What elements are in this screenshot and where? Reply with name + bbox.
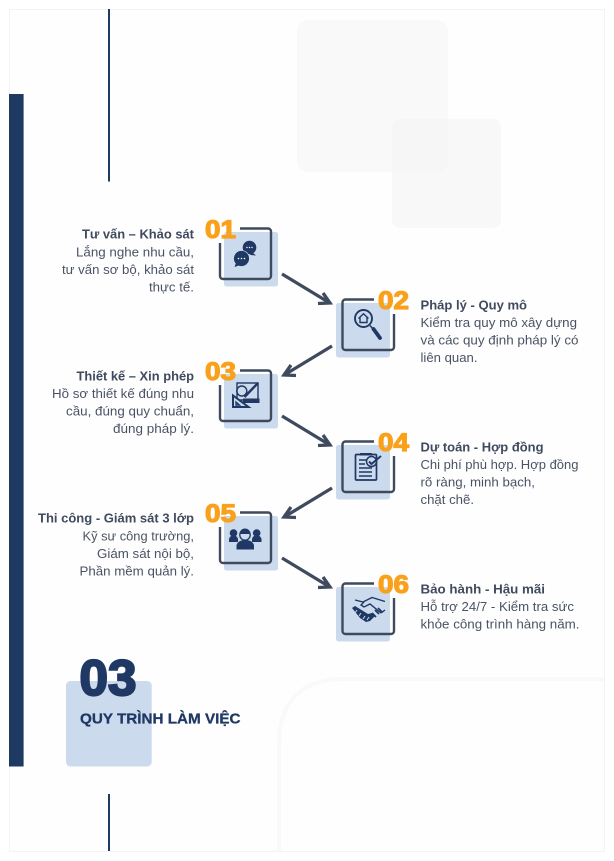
step 01 number: 01 (205, 216, 236, 244)
icon: three engineers (229, 528, 262, 550)
step 02 text: Pháp lý - Quy mô (420, 298, 527, 312)
step 01 (62, 216, 278, 294)
step 03 text: đúng pháp lý. (113, 421, 194, 436)
step 02 text: liên quan. (420, 350, 478, 365)
step 04 text: chặt chẽ. (420, 492, 474, 507)
section heading: QUY TRÌNH LÀM VIỆC (80, 710, 241, 728)
step 02 number: 02 (378, 287, 409, 315)
step 05 text (38, 510, 194, 578)
section number: 03 (80, 650, 136, 706)
step 03 frame (220, 370, 271, 421)
step 01 text: tư vấn sơ bộ, khảo sát (62, 262, 194, 277)
step 04 (336, 429, 578, 507)
step 01 text: thực tế. (149, 280, 194, 294)
step 06 frame (342, 584, 394, 634)
step 03 blue square (224, 374, 278, 428)
step 06 text: Hỗ trợ 24/7 - Kiểm tra sức (420, 599, 574, 614)
step 04 text: rõ ràng, minh bạch, (420, 474, 535, 490)
step 05 text: Giám sát nội bộ, (97, 546, 194, 561)
icon: clipboard with check (356, 453, 381, 480)
bottom vertical line (108, 794, 110, 851)
step 05 text: Kỹ sư công trường, (82, 528, 194, 544)
step 02 text: Kiểm tra quy mô xây dựng (420, 315, 577, 330)
step 03 text: cầu, đúng quy chuẩn, (66, 404, 194, 418)
icon: drafting tools (233, 383, 260, 407)
step 06 number: 06 (378, 571, 409, 599)
step 02 text: và các quy định pháp lý có (420, 332, 578, 348)
step 02 text (420, 298, 578, 365)
step 05 blue square (224, 516, 278, 570)
section title block (66, 650, 241, 766)
step 06 blue square (336, 587, 390, 642)
step 04 text (420, 440, 578, 507)
step 05 number: 05 (205, 500, 236, 528)
arrow 2 to 3 (284, 346, 332, 376)
decorative rounded outline (279, 679, 604, 851)
decorative square small (392, 119, 501, 228)
step 01 text: Tư vấn – Khảo sát (82, 226, 195, 242)
arrow 5 to 6 (282, 558, 330, 588)
step 04 blue square (336, 445, 390, 500)
step 03 text: Thiết kế – Xin phép (76, 368, 194, 384)
step 04 frame (342, 442, 394, 492)
icon: chat bubbles (233, 241, 256, 267)
step 05 text: Thi công - Giám sát 3 lớp (38, 510, 194, 526)
step 02 blue square (336, 303, 390, 358)
step 01 blue square (224, 232, 278, 286)
step 04 number: 04 (378, 429, 409, 457)
step 06 text: khỏe công trình hàng năm. (420, 616, 580, 632)
arrow 4 to 5 (284, 488, 332, 518)
step 06 text (420, 582, 580, 632)
arrow 1 to 2 (282, 274, 330, 304)
step 05 frame (220, 512, 271, 563)
title blue square (66, 681, 152, 766)
icon: magnifier with house (355, 310, 380, 338)
top vertical line (108, 9, 110, 182)
step 01 text (62, 226, 195, 294)
step 06 (336, 571, 580, 642)
step 03 text (52, 368, 194, 436)
step 02 (336, 287, 578, 365)
step 04 text: Dự toán - Hợp đồng (420, 440, 544, 454)
icon: handshake (352, 598, 385, 622)
left navy bar (9, 94, 24, 766)
decorative square large (297, 20, 448, 172)
step 01 frame (220, 228, 271, 279)
step 03 text: Hồ sơ thiết kế đúng nhu (52, 386, 194, 401)
step 04 text: Chi phí phù hợp. Hợp đồng (420, 457, 578, 472)
arrow 3 to 4 (282, 416, 330, 446)
step 05 (38, 500, 278, 578)
step 02 frame (342, 300, 394, 350)
step 06 text: Bảo hành - Hậu mãi (420, 582, 545, 596)
step 03 (52, 358, 278, 436)
step 03 number: 03 (205, 358, 236, 386)
step 01 text: Lắng nghe nhu cầu, (76, 244, 194, 260)
step 05 text: Phần mềm quản lý. (80, 564, 194, 578)
